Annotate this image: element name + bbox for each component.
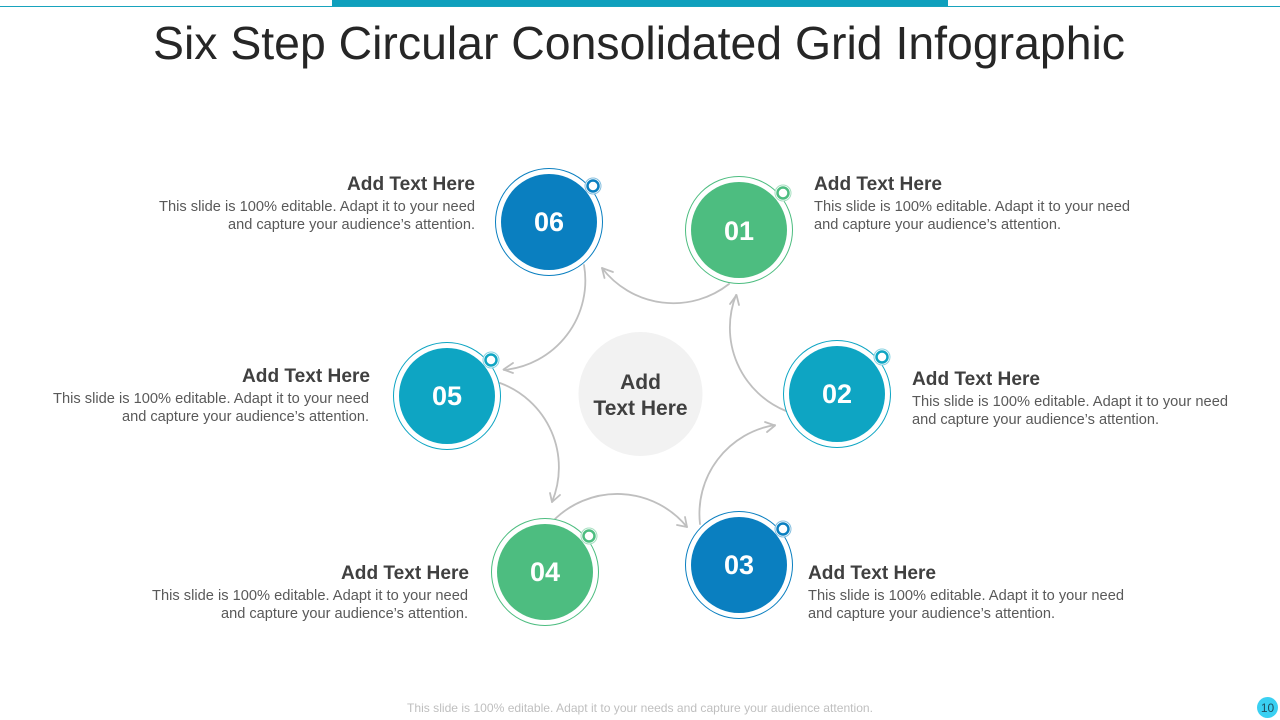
text block: step 06 <box>159 174 475 233</box>
page number badge <box>1257 697 1278 718</box>
text block: step 05: and capture your audience’s attention. <box>122 409 369 425</box>
arrow: 03 to 02 <box>699 422 775 524</box>
step 05 node <box>394 342 500 450</box>
text block: step 01: This slide is 100% editable. Adapt it to your need <box>814 199 1130 215</box>
step 01 node: 01 <box>724 216 754 246</box>
center circle: Add <box>620 371 661 394</box>
text block: step 03: This slide is 100% editable. Adapt it to your need <box>808 588 1124 604</box>
step 04 node: 04 <box>530 557 560 587</box>
step 03 node <box>686 512 792 618</box>
arrow: 05 to 04 <box>500 383 560 502</box>
footer note: This slide is 100% editable. Adapt it to your needs and capture your audience attention. <box>407 701 873 715</box>
center circle: Text Here <box>593 397 688 420</box>
step 05 node: 05 <box>432 381 462 411</box>
text block: step 04: This slide is 100% editable. Adapt it to your need <box>152 588 468 604</box>
text block: step 03: Add Text Here <box>808 563 936 584</box>
title: Six Step Circular Consolidated Grid Infographic <box>153 17 1125 69</box>
step 03 node: 03 <box>724 550 754 580</box>
arrow: 02 to 01 <box>730 295 786 411</box>
text block: step 01: and capture your audience’s attention. <box>814 217 1061 233</box>
text block: step 04: and capture your audience’s attention. <box>221 606 468 622</box>
top accent line <box>0 0 1280 7</box>
text block: step 02: and capture your audience’s attention. <box>912 412 1159 428</box>
text block: step 04: Add Text Here <box>341 563 469 584</box>
text block: step 05 <box>53 366 370 425</box>
text block: step 06: This slide is 100% editable. Adapt it to your need <box>159 199 475 215</box>
step 01 node <box>686 176 792 284</box>
text block: step 03: and capture your audience’s attention. <box>808 606 1055 622</box>
text block: step 06: Add Text Here <box>347 174 475 195</box>
text block: step 02: Add Text Here <box>912 369 1040 390</box>
text block: step 03 <box>808 563 1124 622</box>
step 04 node <box>492 518 598 626</box>
step 02 node <box>784 340 890 448</box>
text block: step 01 <box>814 174 1130 233</box>
center circle <box>578 332 702 456</box>
page number badge: 10 <box>1261 701 1274 715</box>
text block: step 02 <box>912 369 1228 428</box>
arrow: 01 to 06 <box>602 268 729 303</box>
text block: step 02: This slide is 100% editable. Adapt it to your need <box>912 394 1228 410</box>
step 06 node: 06 <box>534 207 564 237</box>
arrow: 06 to 05 <box>504 265 585 373</box>
text block: step 05: Add Text Here <box>242 366 370 387</box>
step 02 node: 02 <box>822 379 852 409</box>
text block: step 05: This slide is 100% editable. Adapt it to your need <box>53 391 369 407</box>
text block: step 04 <box>152 563 469 622</box>
text block: step 06: and capture your audience’s attention. <box>228 217 475 233</box>
step 06 node <box>496 168 602 276</box>
text block: step 01: Add Text Here <box>814 174 942 195</box>
arrow: 04 to 03 <box>553 494 687 527</box>
